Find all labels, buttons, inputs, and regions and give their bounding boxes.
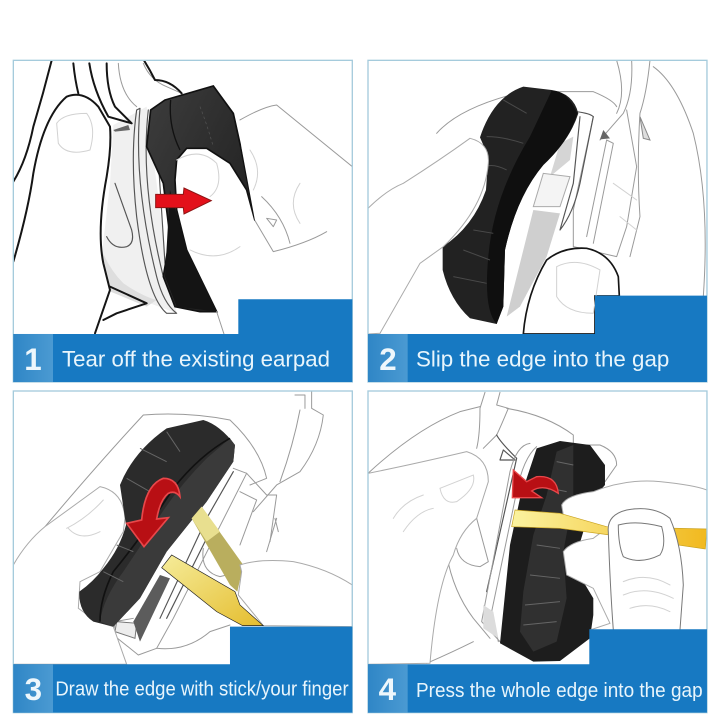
panel frame xyxy=(13,391,352,713)
blue step block xyxy=(13,627,352,713)
icon: red curved arrow down-left xyxy=(127,478,180,547)
illustration: black earpad with ring xyxy=(443,87,578,324)
panel: step 4 xyxy=(368,391,707,713)
blue step block xyxy=(368,296,707,382)
panel: step 2 xyxy=(368,60,707,382)
illustration: first hand outlines xyxy=(13,60,182,334)
number badge xyxy=(13,334,53,382)
illustration: lower thumb xyxy=(523,248,619,334)
number badge: 3 xyxy=(25,672,42,707)
caption: Tear off the existing earpad xyxy=(62,347,330,372)
caption: Slip the edge into the gap xyxy=(416,347,669,372)
blue step block xyxy=(368,629,707,713)
number badge: 1 xyxy=(24,342,42,377)
panel frame xyxy=(368,391,707,713)
illustration: hand holding stick xyxy=(512,481,707,630)
illustration: black earpad xyxy=(500,441,605,662)
illustration: hands and headband xyxy=(380,60,705,333)
number badge xyxy=(13,664,53,713)
illustration: black earpad with ring xyxy=(79,420,235,627)
panel frame xyxy=(13,60,352,382)
blue step block xyxy=(13,299,352,382)
number badge xyxy=(368,664,408,713)
illustration: black earpad xyxy=(147,86,255,312)
caption: Press the whole edge into the gap xyxy=(416,680,703,702)
number badge: 4 xyxy=(379,672,397,707)
panel: step 1 xyxy=(13,60,352,382)
number badge: 2 xyxy=(379,342,397,377)
panel frame xyxy=(368,60,707,382)
illustration: second hand xyxy=(177,105,352,334)
caption: Draw the edge with stick/your finger xyxy=(55,679,349,701)
number badge xyxy=(368,334,408,382)
illustration: hands and headband xyxy=(13,392,323,664)
panel: step 3 xyxy=(13,391,352,713)
illustration: yellow stick xyxy=(162,507,352,627)
icon: red arrow pointing right xyxy=(156,188,211,214)
icon: red curved arrow left xyxy=(512,470,558,498)
illustration: headphone cup shading xyxy=(102,63,182,313)
illustration: thumb in front of earpad xyxy=(368,138,488,334)
illustration: hands and headband xyxy=(368,392,617,664)
